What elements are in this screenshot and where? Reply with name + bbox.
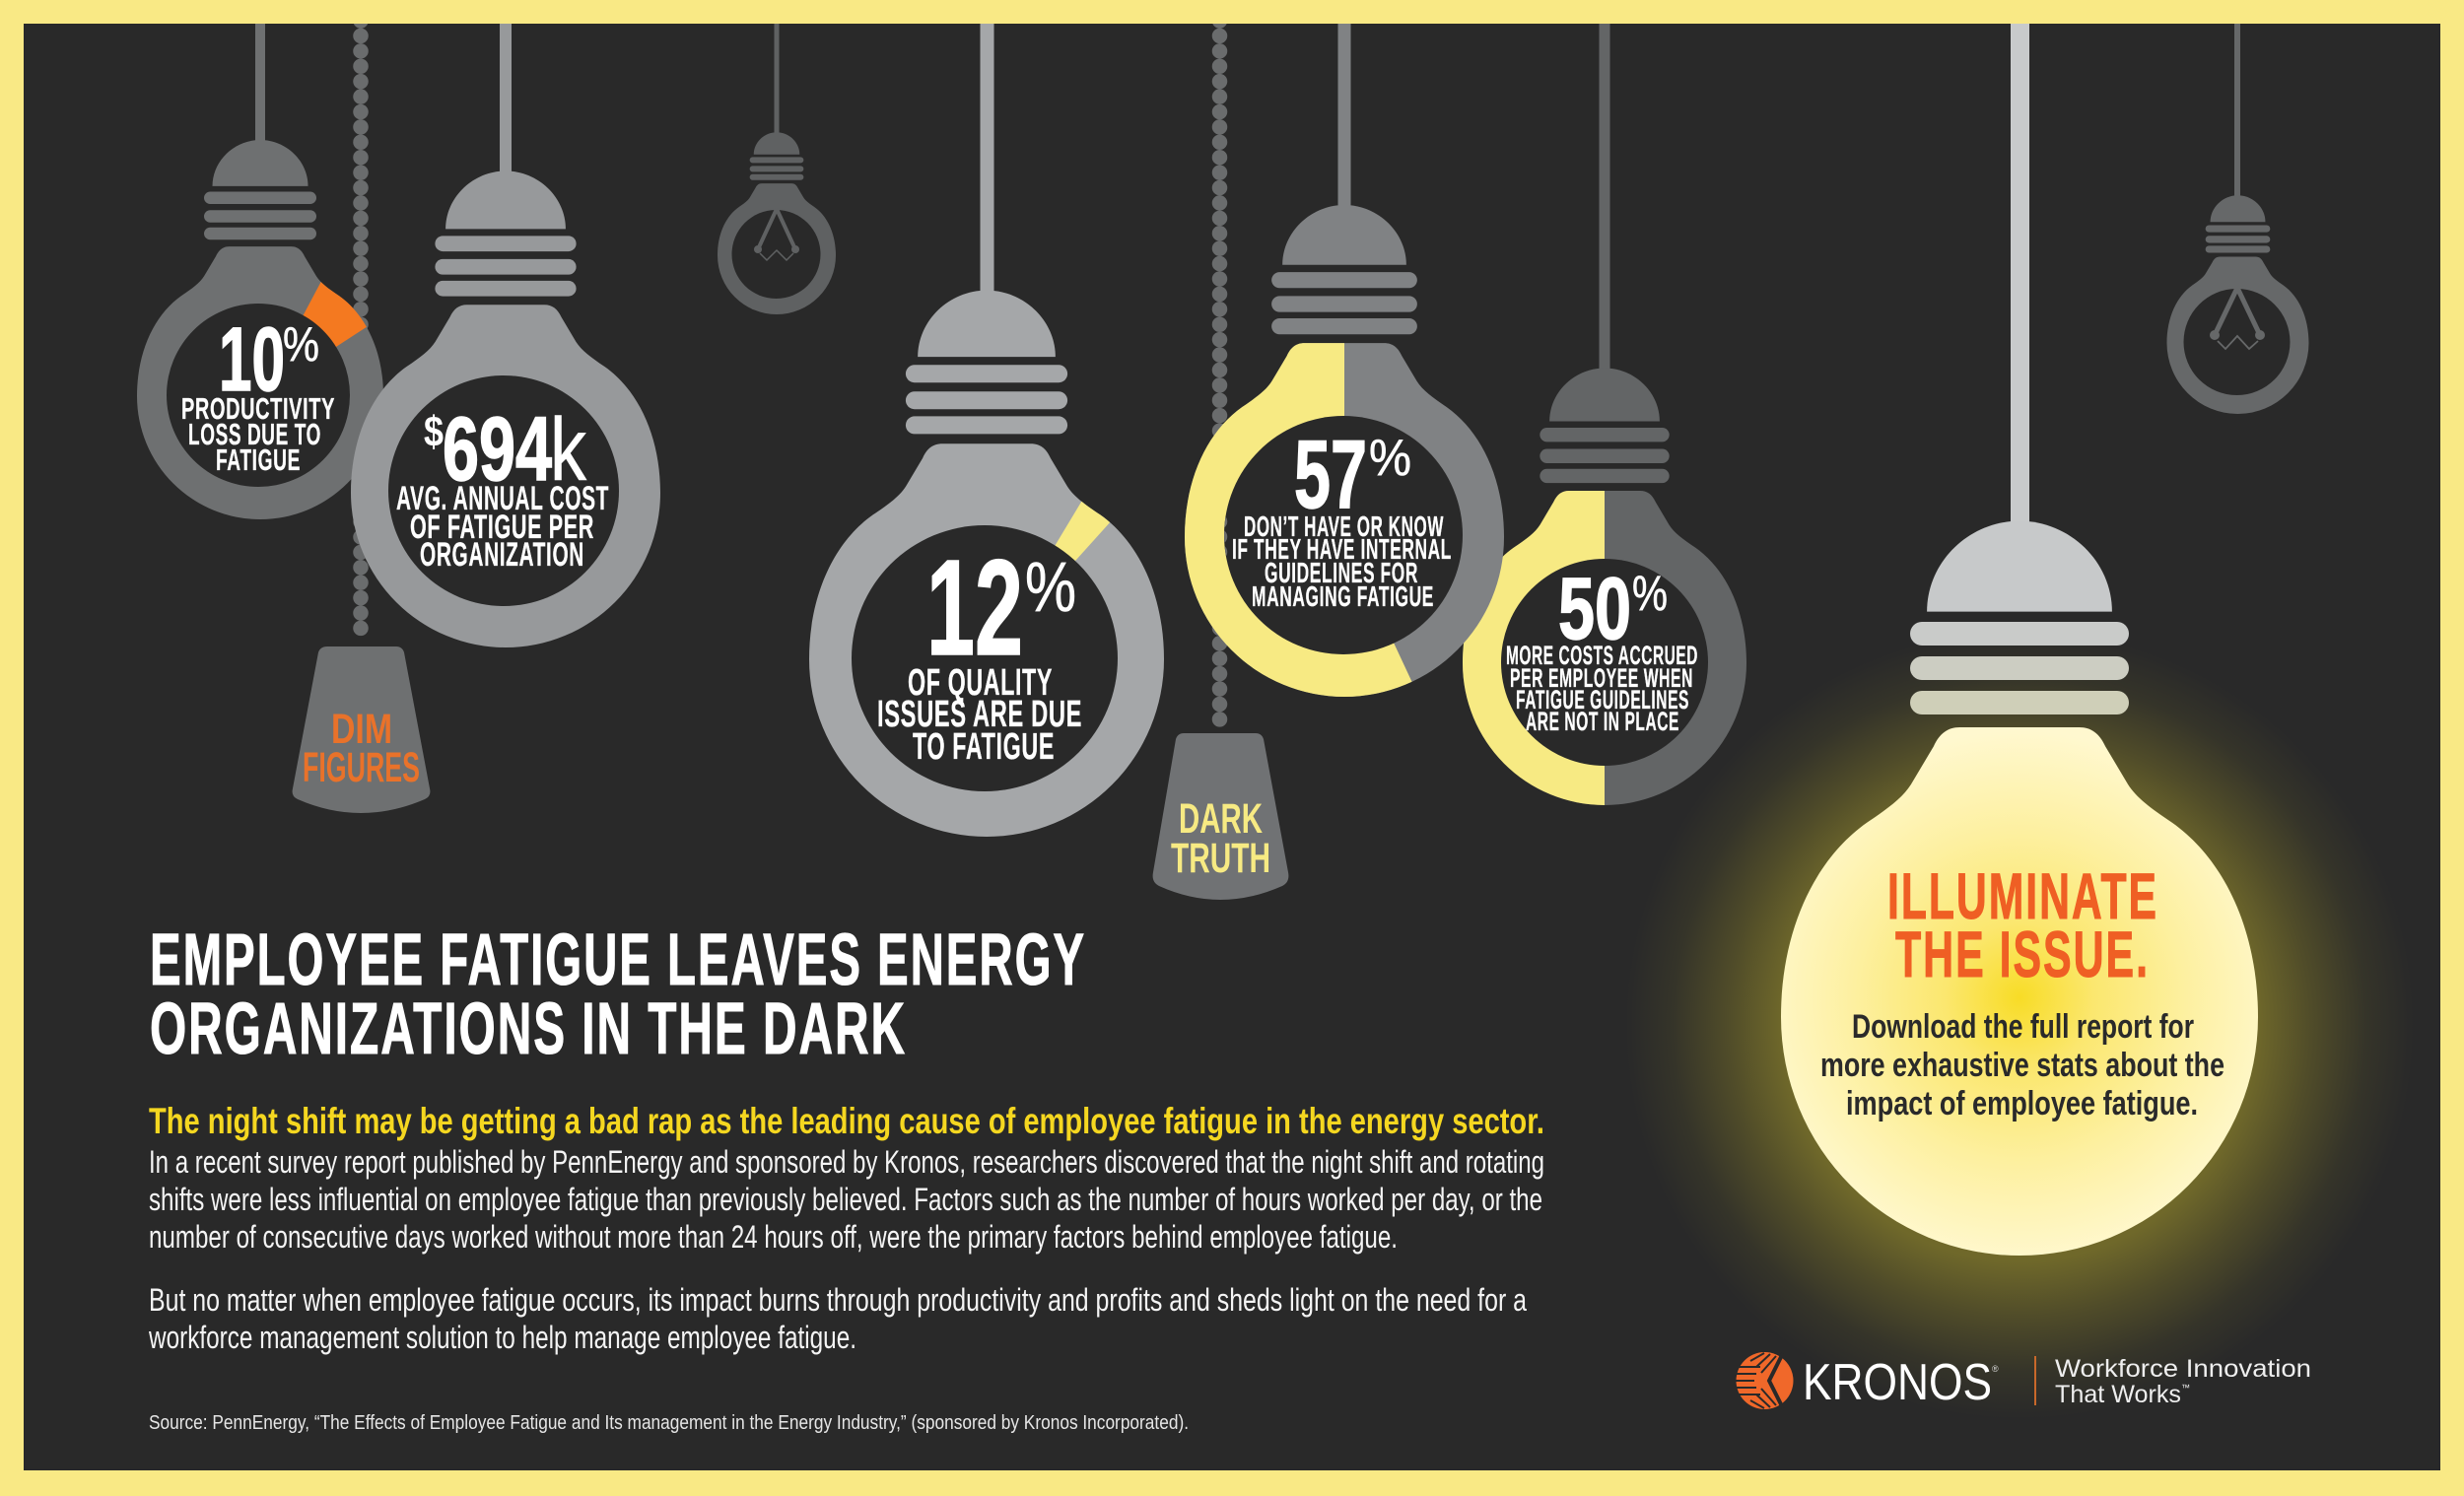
bulb: $694k average annual cost — [351, 24, 660, 647]
body paragraph 1: shifts were less influential on employee fatigue than previously believed. Factors such as the number of hours worked per day, or the — [149, 1182, 1542, 1217]
stat: 12%: % — [1025, 549, 1076, 627]
pull weight: dim figures — [293, 646, 430, 813]
stat: 57%: IF THEY HAVE INTERNAL — [1232, 534, 1452, 566]
stat: 12%: TO FATIGUE — [913, 726, 1055, 768]
stat: 12% — [877, 532, 1082, 768]
glow around lit bulb — [1625, 631, 2414, 1419]
stat: $694k: AVG. ANNUAL COST — [396, 480, 609, 517]
stat: 10%: PRODUCTIVITY — [181, 391, 335, 426]
callout body: impact of employee fatigue. — [1846, 1085, 2198, 1122]
stat: 50%: % — [1632, 566, 1668, 621]
stat: 10% — [181, 309, 335, 477]
body paragraph 1: number of consecutive days worked without more than 24 hours off, were the primary factors behind employee fatigue. — [149, 1219, 1398, 1255]
pull weight: dark truth: DARK — [1179, 795, 1263, 843]
divider — [2034, 1356, 2036, 1405]
yellow 50% half — [1463, 491, 1605, 805]
pull weight: dim figures: FIGURES — [303, 744, 420, 791]
wordmark: KRONOS — [1803, 1354, 1992, 1411]
bulb: 10% productivity loss — [137, 24, 394, 519]
stat: 57%: 57 — [1294, 420, 1367, 528]
stat: 10%: % — [283, 318, 319, 372]
small unlit bulb with filament — [718, 24, 836, 314]
pull weight: dark truth — [1153, 733, 1288, 900]
stat: 12%: 12 — [926, 532, 1023, 684]
bulb: 50% more costs accrued — [1321, 24, 1746, 947]
stat: 57%: DON’T HAVE OR KNOW — [1244, 511, 1444, 543]
bulb: 12% quality issues — [809, 24, 1164, 837]
pull weight: dark truth: TRUTH — [1171, 835, 1270, 882]
small unlit bulb right with filament — [2166, 24, 2308, 414]
stat: 12%: ISSUES ARE DUE — [877, 694, 1082, 735]
stat: 50%: MORE COSTS ACCRUED — [1506, 641, 1698, 670]
yellow 12% segment — [1055, 501, 1110, 561]
pull weight: dim figures: DIM — [331, 706, 392, 753]
stat: 57%: % — [1369, 430, 1411, 487]
tagline — [2055, 1355, 2311, 1408]
stat: 57%: GUIDELINES FOR — [1265, 558, 1418, 589]
stat: $694k — [396, 399, 609, 574]
stat: 57% — [1232, 420, 1452, 613]
stat: 50%: ARE NOT IN PLACE — [1526, 707, 1679, 736]
stat: 57%: MANAGING FATIGUE — [1252, 581, 1434, 613]
registered mark: ® — [1992, 1364, 1999, 1374]
source note: Source: PennEnergy, “The Effects of Employee Fatigue and Its management in the Energy Industry,” (sponsored by Kronos Incorporated). — [149, 1412, 1189, 1434]
tagline: ™ — [2181, 1383, 2190, 1393]
stat: 50%: FATIGUE GUIDELINES — [1516, 685, 1689, 714]
stat: 10%: 10 — [219, 309, 285, 410]
stat: $694k: OF FATIGUE PER — [410, 509, 594, 546]
icon: Kronos globe — [1736, 1352, 1794, 1409]
callout body: more exhaustive stats about the — [1820, 1047, 2224, 1084]
title: EMPLOYEE FATIGUE LEAVES ENERGY — [150, 918, 1086, 1000]
stat: 50%: 50 — [1558, 559, 1631, 657]
stat: $694k: k — [550, 401, 587, 500]
callout body — [1820, 1008, 2224, 1122]
yellow 57% segment — [1185, 343, 1411, 697]
stat: 50%: PER EMPLOYEE WHEN — [1510, 663, 1693, 693]
filament — [755, 209, 798, 260]
tagline: Workforce Innovation — [2055, 1355, 2311, 1383]
body paragraph 2 — [148, 1282, 1527, 1355]
body paragraph 2: workforce management solution to help manage employee fatigue. — [148, 1320, 856, 1355]
stat: 10%: FATIGUE — [216, 442, 301, 477]
pull chain: dark truth — [1153, 21, 1288, 900]
stat: 12%: OF QUALITY — [908, 662, 1053, 704]
title — [150, 918, 1086, 1069]
filament — [2210, 288, 2265, 349]
stat: 50% — [1506, 559, 1698, 736]
yellow subheading: The night shift may be getting a bad rap as the leading cause of employee fatigue in the energy sector. — [149, 1101, 1544, 1141]
stat: $694k: $ — [424, 408, 444, 456]
bulb: 57% guidelines — [1185, 24, 1504, 697]
callout heading: THE ISSUE. — [1895, 918, 2150, 990]
pull chain: dim figures — [293, 21, 430, 813]
callout heading: ILLUMINATE — [1887, 859, 2158, 932]
stat: 10%: LOSS DUE TO — [188, 417, 321, 451]
orange 10% segment — [304, 282, 367, 347]
title: ORGANIZATIONS IN THE DARK — [150, 987, 907, 1069]
body paragraph 1: In a recent survey report published by PennEnergy and sponsored by Kronos, researchers discovered that the night shift and rotating — [149, 1144, 1544, 1180]
tagline: That Works — [2055, 1381, 2181, 1408]
body paragraph 1 — [149, 1144, 1544, 1255]
callout body: Download the full report for — [1852, 1008, 2194, 1046]
Kronos logo — [1736, 1352, 2311, 1411]
stat: $694k: 694 — [443, 399, 552, 500]
body paragraph 2: But no matter when employee fatigue occurs, its impact burns through productivity and profits and sheds light on the need for a — [149, 1282, 1527, 1318]
stat: $694k: ORGANIZATION — [420, 536, 584, 574]
lit bulb: illuminate the issue — [1781, 24, 2258, 1256]
callout heading — [1887, 859, 2158, 990]
